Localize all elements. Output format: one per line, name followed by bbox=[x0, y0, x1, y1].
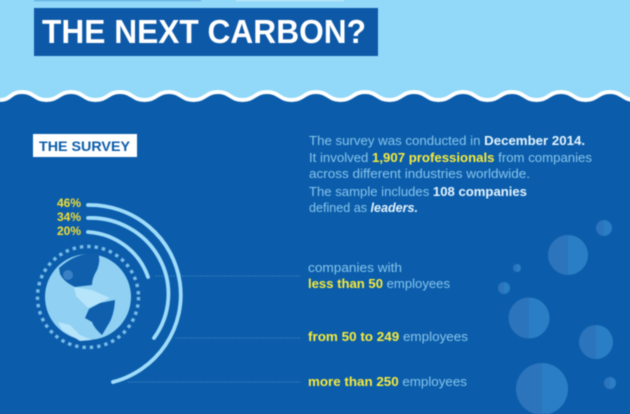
bubbles bbox=[498, 220, 616, 414]
survey description: The sample includes 108 companies bbox=[309, 185, 527, 199]
percentages: 20% bbox=[57, 226, 81, 238]
heading: the survey bbox=[33, 134, 137, 157]
label: less than 50 employees: companies with bbox=[308, 261, 402, 275]
percentages bbox=[57, 198, 81, 238]
label: from 50 to 249 employees: from 50 to 249 employees bbox=[308, 330, 468, 344]
heading: the survey: THE SURVEY bbox=[39, 138, 131, 154]
sky background bbox=[0, 0, 630, 102]
survey description: The survey was conducted in December 2014. bbox=[309, 134, 585, 148]
survey description: It involved 1,907 professionals from companies bbox=[309, 151, 592, 165]
label: less than 50 employees bbox=[308, 261, 450, 291]
survey description: defined as leaders. bbox=[309, 201, 418, 215]
leader lines bbox=[128, 276, 300, 382]
wave waterline bbox=[0, 92, 630, 100]
cropped element at top edge bbox=[34, 0, 344, 1]
concentric percentage arcs bbox=[88, 205, 181, 382]
title: THE NEXT CARBON? bbox=[42, 13, 366, 50]
percentages: 34% bbox=[57, 212, 81, 224]
survey description bbox=[309, 134, 592, 215]
globe bbox=[38, 246, 138, 348]
sea bbox=[0, 92, 630, 414]
label: more than 250 employees: more than 250 employees bbox=[308, 375, 467, 389]
survey description: across different industries worldwide. bbox=[309, 167, 530, 181]
label: less than 50 employees: less than 50 employees bbox=[308, 277, 450, 291]
percentages: 46% bbox=[57, 198, 81, 210]
